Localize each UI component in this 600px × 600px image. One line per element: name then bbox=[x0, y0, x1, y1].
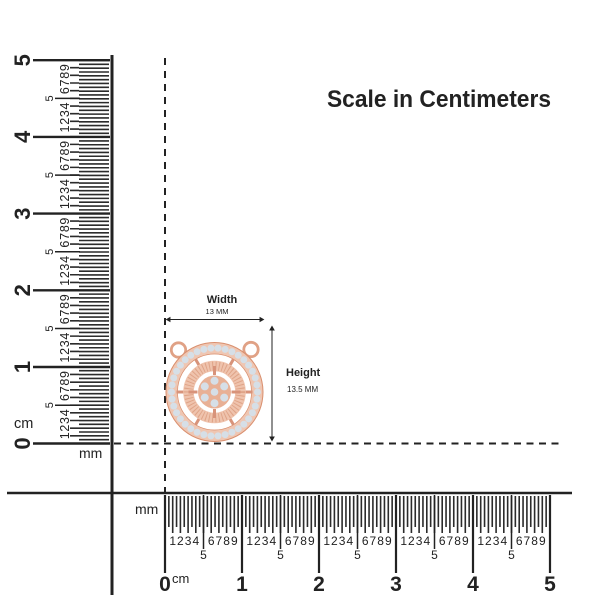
bottom ruler millimetre labels bbox=[169, 534, 546, 562]
left ruler mm unit: mm bbox=[79, 445, 102, 461]
bottom ruler millimetre labels: 5 bbox=[277, 548, 284, 562]
left ruler millimetre labels: 5 bbox=[44, 325, 56, 332]
bottom ruler centimetre numbers: 5 bbox=[544, 573, 556, 596]
left ruler centimetre numbers: 0 bbox=[10, 437, 35, 450]
left ruler centimetre numbers: 1 bbox=[10, 361, 35, 373]
width arrow bbox=[166, 318, 264, 322]
dashed guide: horizontal zero bbox=[114, 442, 560, 444]
left ruler centimetre numbers: 3 bbox=[10, 207, 35, 220]
bottom ruler centimetre numbers: 4 bbox=[467, 573, 479, 596]
left ruler millimetre labels: 5 bbox=[44, 249, 56, 255]
height arrow bbox=[270, 326, 274, 440]
height value: 13.5 MM bbox=[287, 385, 318, 394]
bottom ruler millimetre labels: 5 bbox=[431, 548, 438, 562]
bottom ruler millimetre labels: 12346789 bbox=[477, 534, 546, 548]
bottom ruler centimetre numbers: 2 bbox=[313, 573, 325, 596]
left ruler millimetre labels bbox=[44, 64, 72, 439]
left ruler millimetre labels: 5 bbox=[44, 172, 56, 178]
bottom ruler millimetre labels: 5 bbox=[508, 548, 515, 562]
left ruler cm unit: cm bbox=[14, 416, 33, 432]
title: Scale in Centimeters bbox=[327, 86, 551, 113]
left loop bbox=[171, 343, 186, 357]
center diamonds bbox=[203, 381, 226, 403]
left ruler millimetre labels: 12346789 bbox=[58, 218, 72, 286]
bottom ruler mm unit: mm bbox=[135, 501, 158, 517]
left ruler millimetre labels: 12346789 bbox=[58, 64, 72, 132]
bottom ruler millimetre labels: 12346789 bbox=[246, 534, 315, 548]
left ruler millimetre labels: 12346789 bbox=[58, 371, 72, 439]
width label: Width bbox=[207, 294, 237, 306]
bottom ruler millimetre labels: 5 bbox=[354, 548, 361, 562]
left ruler millimetre labels: 5 bbox=[44, 402, 56, 408]
width value: 13 MM bbox=[206, 307, 228, 316]
bottom ruler centimetre numbers bbox=[159, 573, 556, 596]
middle ribbed ring bbox=[188, 366, 240, 418]
outer spokes bbox=[176, 359, 252, 425]
left ruler centimetre numbers: 4 bbox=[10, 130, 35, 143]
left ruler millimetre labels: 5 bbox=[44, 95, 56, 101]
left ruler centimetre numbers bbox=[10, 54, 35, 450]
bottom ruler millimetre labels: 5 bbox=[200, 548, 207, 562]
inner spokes bbox=[188, 366, 240, 418]
right loop bbox=[244, 342, 258, 357]
height label: Height bbox=[286, 367, 321, 379]
bottom ruler millimetre labels: 12346789 bbox=[323, 534, 392, 548]
left ruler millimetre labels: 12346789 bbox=[58, 141, 72, 209]
left ruler millimetre labels: 12346789 bbox=[58, 294, 72, 363]
left ruler centimetre numbers: 2 bbox=[10, 284, 35, 296]
outer ring bbox=[166, 342, 263, 442]
bottom ruler centimetre numbers: 3 bbox=[390, 573, 402, 596]
center stone bbox=[211, 388, 218, 396]
outer diamonds bbox=[172, 348, 258, 436]
left vertical ruler bbox=[33, 55, 112, 595]
bottom ruler millimetre labels: 12346789 bbox=[400, 534, 469, 548]
bottom ruler centimetre numbers: 0 bbox=[159, 573, 171, 596]
dashed guide: vertical zero bbox=[164, 58, 166, 493]
bottom ruler centimetre numbers: 1 bbox=[236, 573, 248, 596]
left ruler centimetre numbers: 5 bbox=[10, 54, 35, 66]
bottom horizontal ruler bbox=[7, 493, 572, 573]
bottom ruler millimetre labels: 12346789 bbox=[169, 534, 238, 548]
pendant illustration bbox=[166, 342, 263, 442]
center cluster base bbox=[198, 376, 231, 408]
bottom ruler cm unit: cm bbox=[172, 571, 189, 586]
